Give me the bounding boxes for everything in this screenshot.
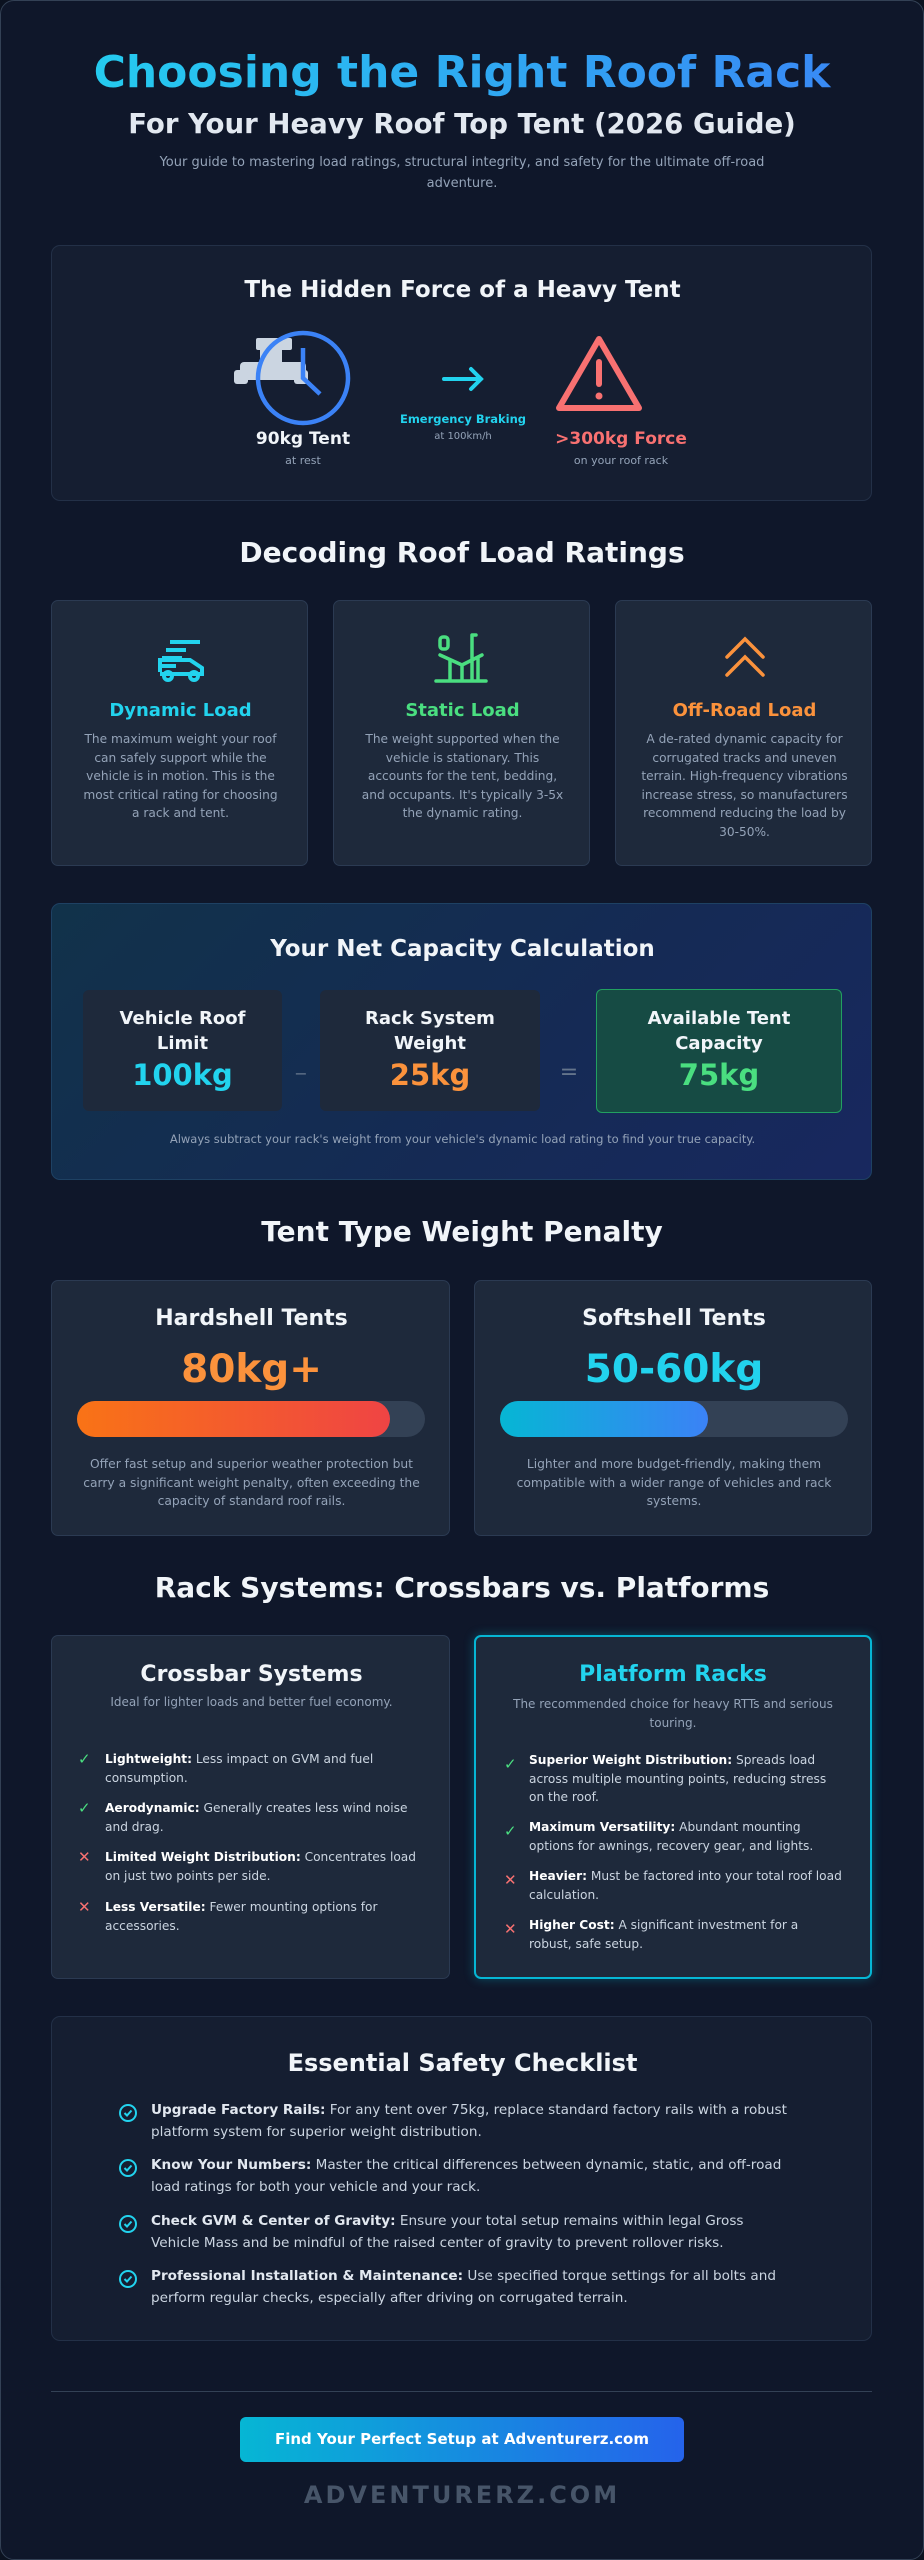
operator equals: = <box>560 1060 578 1085</box>
title: Off-Road Load <box>673 700 816 721</box>
box: available capacity: Available Tent <box>648 1008 790 1029</box>
card: platform racks <box>474 1635 872 1979</box>
label: 300kg force: >300kg Force <box>555 429 687 449</box>
pros and cons list: Less Versatile: Fewer mounting options for accessories. <box>105 1900 378 1933</box>
panel: net capacity <box>51 903 872 1180</box>
card: hardshell <box>51 1280 450 1536</box>
title: Crossbar Systems <box>140 1662 363 1687</box>
checklist items: Check GVM & Center of Gravity: Ensure your total setup remains within legal Gross Vehicle Mass and be mindful of the raised center of gravity to prevent rollover risks. <box>151 2213 744 2250</box>
checklist items: Professional Installation & Maintenance: Use specified torque settings for all bolts and perform regular checks, especially after driving on corrugated terrain. <box>151 2268 776 2306</box>
pros and cons list: ✕ <box>78 1848 91 1866</box>
heading: The Hidden Force of a Heavy Tent <box>244 277 681 303</box>
card: dynamic load <box>51 600 308 866</box>
card: static load <box>333 600 590 866</box>
icon: warning <box>556 336 642 411</box>
pros and cons list: ✕ <box>504 1871 517 1889</box>
pros and cons list: Lightweight: Less impact on GVM and fuel consumption. <box>105 1752 373 1785</box>
card: off-road load <box>615 600 872 866</box>
description: The weight supported when the vehicle is stationary. This accounts for the tent, bedding, and occupants. It's typically 3-5x the dynamic rating. <box>362 732 563 820</box>
pros and cons list: ✕ <box>504 1920 517 1938</box>
box: available capacity <box>596 989 842 1113</box>
card: softshell <box>474 1280 872 1536</box>
box: vehicle roof limit: Limit <box>157 1033 208 1054</box>
box: vehicle roof limit: Vehicle Roof <box>120 1008 245 1029</box>
icon: moving truck <box>158 640 204 682</box>
CTA button <box>240 2417 684 2462</box>
checklist items: Upgrade Factory Rails: For any tent over 75kg, replace standard factory rails with a robust platform system for superior weight distribution. <box>151 2102 787 2140</box>
value: 50-60kg <box>585 1347 763 1392</box>
box: vehicle roof limit: 100kg <box>132 1058 233 1092</box>
panel: safety checklist <box>51 2016 872 2341</box>
pros and cons list: ✓ <box>504 1755 517 1773</box>
heading: Essential Safety Checklist <box>288 2049 637 2077</box>
box: rack weight <box>320 990 540 1111</box>
bar <box>77 1401 425 1437</box>
heading: tent type: Tent Type Weight Penalty <box>261 1215 663 1248</box>
description: A de-rated dynamic capacity for corrugated tracks and uneven terrain. High-frequency vibrations increase stress, so manufacturers recommend reducing the load by 30-50%. <box>641 732 848 838</box>
label: 90kg tent <box>256 429 350 467</box>
pros and cons list: ✓ <box>78 1799 91 1817</box>
pros and cons list: Limited Weight Distribution: Concentrates load on just two points per side. <box>105 1850 416 1883</box>
box: available capacity: Capacity <box>675 1033 763 1054</box>
pros and cons list: ✕ <box>78 1898 91 1916</box>
pros and cons list <box>78 1750 416 1933</box>
icon: chevrons <box>725 636 765 677</box>
box: rack weight: Weight <box>394 1033 466 1054</box>
pros and cons list: Heavier: Must be factored into your total roof load calculation. <box>529 1869 842 1902</box>
pros and cons list: Higher Cost: A significant investment for a robust, safe setup. <box>529 1918 798 1951</box>
box: rack weight: 25kg <box>390 1058 470 1092</box>
icon: static <box>434 633 488 683</box>
title: Static Load <box>405 700 520 721</box>
heading: Your Net Capacity Calculation <box>270 936 655 962</box>
label: 90kg tent: at rest <box>285 454 321 467</box>
label: emergency braking: at 100km/h <box>434 431 492 442</box>
title: Hardshell Tents <box>155 1306 348 1331</box>
box: rack weight: Rack System <box>365 1008 495 1029</box>
description: Offer fast setup and superior weather protection but carry a significant weight penalty, often exceeding the capacity of standard roof rails. <box>83 1457 420 1508</box>
heading: rack systems: Rack Systems: Crossbars vs. Platforms <box>155 1571 769 1604</box>
CTA button: Find Your Perfect Setup at Adventurerz.com <box>275 2430 649 2448</box>
description: Lighter and more budget-friendly, making them compatible with a wider range of vehicles and rack systems. <box>517 1457 831 1508</box>
note: Always subtract your rack's weight from your vehicle's dynamic load rating to find your true capacity. <box>170 1132 755 1146</box>
pros and cons list: ✓ <box>78 1750 91 1768</box>
title: Dynamic Load <box>109 700 252 721</box>
pros and cons list: Superior Weight Distribution: Spreads load across multiple mounting points, reducing stress on the roof. <box>529 1753 826 1804</box>
heading: decoding: Decoding Roof Load Ratings <box>239 536 685 569</box>
description: The maximum weight your roof can safely support while the vehicle is in motion. This is the most critical rating for choosing a rack and tent. <box>83 732 278 820</box>
pros and cons list: Maximum Versatility: Abundant mounting options for awnings, recovery gear, and lights. <box>529 1820 813 1853</box>
card: crossbar systems <box>51 1635 450 1979</box>
checklist items <box>119 2102 787 2306</box>
subtitle: Ideal for lighter loads and better fuel economy. <box>110 1695 393 1709</box>
value: 80kg+ <box>181 1347 322 1392</box>
operator minus: − <box>294 1064 308 1083</box>
box: vehicle roof limit <box>83 990 282 1111</box>
pros and cons list <box>504 1753 842 1951</box>
panel: hidden force <box>51 245 872 501</box>
title: Platform Racks <box>579 1662 767 1687</box>
label: 90kg tent: 90kg Tent <box>256 429 350 449</box>
arrow <box>442 366 484 392</box>
label: emergency braking: Emergency Braking <box>400 412 526 426</box>
box: available capacity: 75kg <box>679 1058 759 1092</box>
label: 300kg force: on your roof rack <box>574 454 668 467</box>
bar <box>500 1401 848 1437</box>
title: Softshell Tents <box>582 1306 766 1331</box>
checklist items: Know Your Numbers: Master the critical differences between dynamic, static, and off-road load ratings for both your vehicle and your rack. <box>151 2157 781 2194</box>
label: emergency braking <box>400 412 526 442</box>
pros and cons list: ✓ <box>504 1822 517 1840</box>
pros and cons list: Aerodynamic: Generally creates less wind noise and drag. <box>105 1801 408 1834</box>
subtitle: For Your Heavy Roof Top Tent (2026 Guide) <box>128 107 796 140</box>
icon: truck with clock <box>234 330 350 426</box>
label: 300kg force <box>555 429 687 467</box>
subtitle: The recommended choice for heavy RTTs and serious touring. <box>513 1697 833 1730</box>
footer brand: ADVENTURERZ.COM <box>304 2481 620 2509</box>
intro text: Your guide to mastering load ratings, structural integrity, and safety for the ultimate off-road adventure. <box>160 155 764 191</box>
